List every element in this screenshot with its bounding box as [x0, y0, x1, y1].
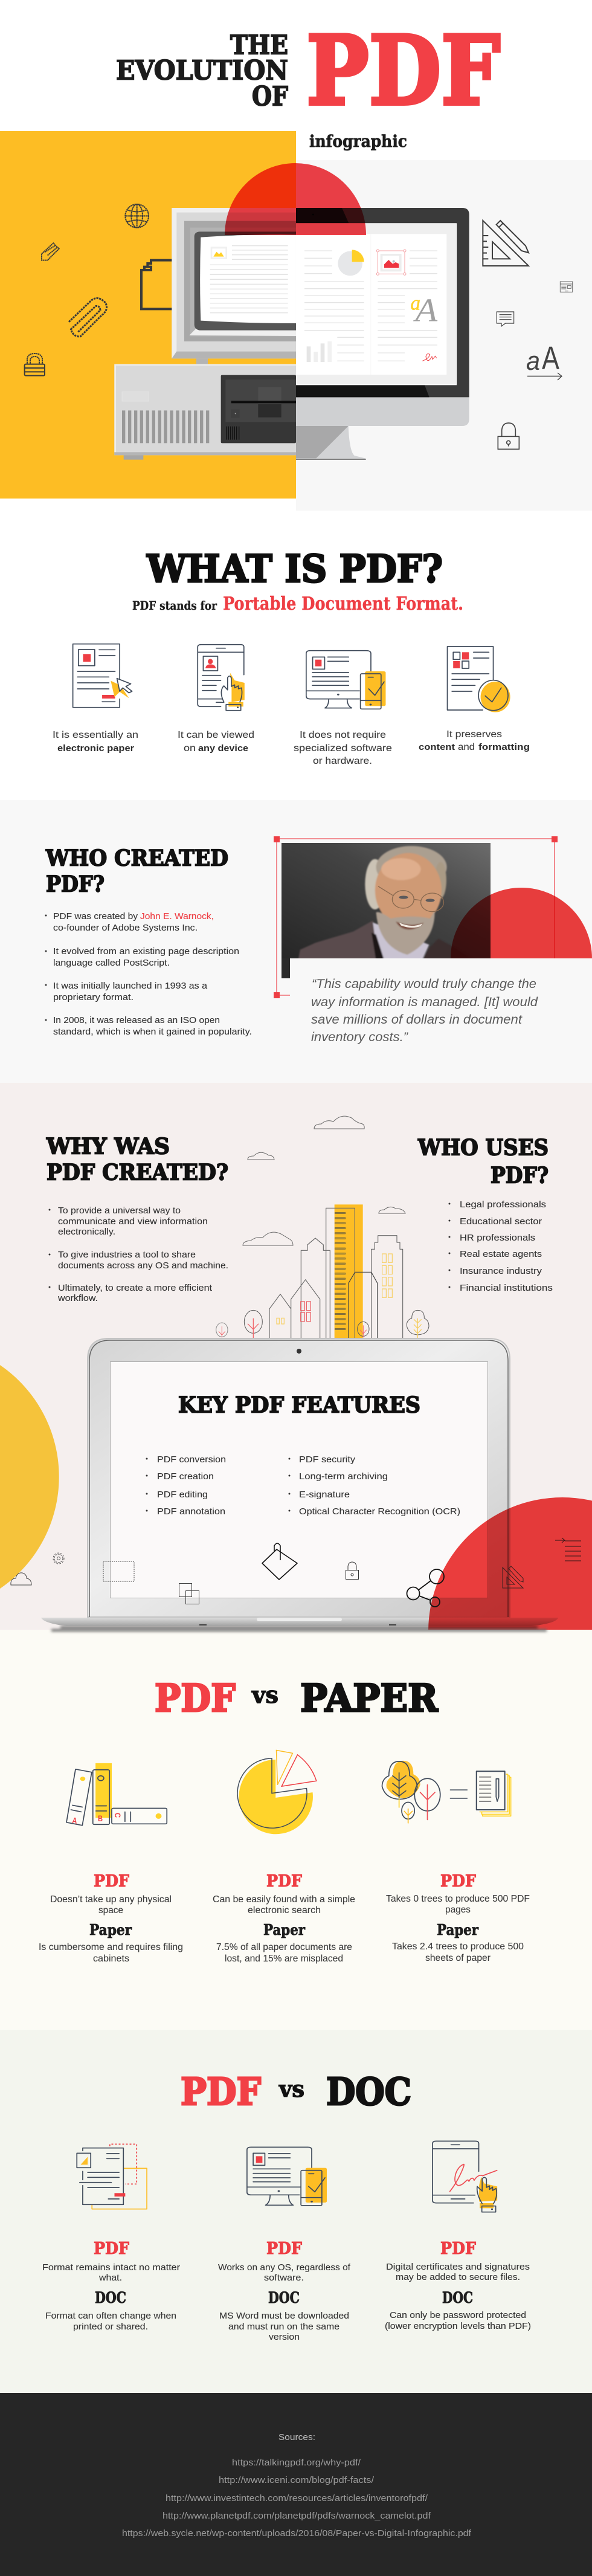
text: preserves formatting — [419, 729, 530, 752]
text: any device: on — [184, 743, 196, 754]
section background — [0, 800, 592, 1083]
modern monitor — [296, 208, 469, 460]
clouds — [243, 1116, 405, 1245]
column: format: Format remains intact no matter — [42, 2262, 180, 2273]
column: security: may be added to secure files. — [396, 2272, 520, 2282]
bullet list: why created: communicate and view information — [58, 1216, 208, 1227]
column: format: what. — [98, 2273, 122, 2283]
trees — [216, 1310, 429, 1338]
column: security: Digital certificates and signatures — [386, 2262, 530, 2272]
column: no physical space: Doesn’t take up any physical — [50, 1894, 172, 1905]
heading: what is pdf: WHAT IS PDF? — [146, 546, 443, 591]
monitor stand — [296, 426, 366, 460]
column: electronic search: electronic search — [248, 1905, 321, 1916]
bullet list: features left: PDF conversion — [157, 1454, 226, 1465]
laptop base — [41, 1618, 558, 1626]
bullet list: features right: E-signature — [299, 1490, 350, 1500]
column: format: DOC — [95, 2289, 126, 2306]
column: format: Format can often change when — [45, 2311, 176, 2321]
text: any device: It can be viewed — [178, 730, 254, 740]
monitor chin — [296, 397, 469, 426]
heading: pdf vs doc: PDF — [181, 2070, 261, 2114]
icon: share — [407, 1569, 444, 1607]
bullet list: features left: PDF creation — [157, 1471, 214, 1482]
modern document lines — [304, 251, 437, 361]
icon: text direction aA: A — [542, 340, 559, 376]
bullet list: who created: standard, which is when it gained in popularity. — [53, 1027, 252, 1037]
icon: pixel lock — [25, 353, 45, 376]
column: trees: sheets of paper — [425, 1953, 491, 1963]
icon: content preserved — [448, 647, 510, 712]
panel: pdf vs doc — [0, 2030, 592, 2393]
bullet list: features right: Optical Character Recognition (OCR) — [299, 1506, 460, 1517]
bullet list: who created: It was initially launched in 1993 as a — [53, 981, 208, 991]
column: electronic search: lost, and 15% are misplaced — [225, 1954, 343, 1964]
column: trees: Takes 0 trees to produce 500 PDF — [386, 1894, 530, 1904]
column: operating system: Works on any OS, regardless of — [218, 2262, 351, 2273]
laptop lid — [88, 1338, 510, 1617]
red selection frame — [274, 836, 558, 998]
illustration: city skyline — [216, 1204, 429, 1338]
icon: text direction aA: a — [526, 346, 540, 376]
bullet list: why created: To provide a universal way to — [58, 1206, 181, 1216]
laptop camera — [297, 1349, 301, 1354]
heading: pdf vs doc: vs — [278, 2076, 304, 2102]
column: operating system: version — [269, 2332, 300, 2342]
bullet list: why created — [48, 1206, 228, 1303]
heading: who uses pdf: WHO USES — [417, 1135, 549, 1160]
text: electronic paper: electronic paper — [57, 743, 134, 754]
retro system unit — [114, 364, 296, 460]
column: security: Can only be password protected — [390, 2310, 526, 2320]
typography sample: a — [410, 292, 420, 315]
column: operating system: and must run on the same — [228, 2322, 339, 2332]
text: electronic paper: It is essentially an — [53, 730, 138, 740]
panel: who created pdf — [45, 836, 592, 1044]
red semicircle overlay — [225, 163, 366, 235]
bullet list: who uses: Educational sector — [460, 1216, 542, 1227]
quote: “This capability would truly change the — [312, 976, 536, 991]
icon: electronic paper — [73, 644, 132, 708]
icon: format intact — [77, 2144, 147, 2209]
bullet list: who created: It evolved from an existing page description — [53, 946, 239, 957]
icon: speech bubble — [497, 312, 514, 326]
bullet list: why created: documents across any OS and machine. — [58, 1261, 228, 1271]
quote: save millions of dollars in document — [311, 1012, 523, 1027]
icon: binders — [66, 1763, 167, 1825]
yellow circle — [0, 1365, 59, 1589]
text: preserves formatting: and — [458, 742, 475, 752]
bullet list: who uses: Financial institutions — [460, 1283, 553, 1293]
icon: pie chart — [237, 1750, 317, 1834]
laptop — [41, 1338, 558, 1629]
panel: what is pdf — [53, 546, 530, 766]
icon: trees equal paper — [382, 1761, 511, 1823]
quote: way information is managed. [It] would — [311, 995, 538, 1009]
icon: padlock — [498, 423, 519, 449]
heading: who created pdf: WHO CREATED — [45, 846, 228, 871]
bullet list: who uses: Legal professionals — [460, 1199, 546, 1210]
column: no physical space: Is cumbersome and requires filing — [39, 1942, 183, 1952]
text: any device — [178, 730, 254, 754]
text: preserves formatting: formatting — [478, 742, 530, 752]
icon: small lock — [346, 1562, 359, 1580]
column: no physical space: Paper — [89, 1921, 132, 1938]
icon: any device — [198, 645, 245, 711]
text: no special software — [294, 730, 392, 766]
text: no special software: specialized software — [294, 743, 392, 754]
column: electronic search: 7.5% of all paper documents are — [216, 1942, 352, 1952]
bullet list: features left: PDF annotation — [157, 1506, 225, 1517]
bar chart — [307, 341, 332, 362]
bullet list: who created — [45, 911, 252, 1037]
bullet list: who created: In 2008, it was released as an ISO open — [53, 1015, 220, 1025]
column: operating system: DOC — [268, 2289, 300, 2306]
bullet list: features right — [289, 1454, 460, 1517]
source links: http://www.iceni.com/blog/pdf-facts/ — [219, 2476, 375, 2485]
picture frame with handles — [376, 250, 406, 275]
binder letters: C — [113, 1813, 122, 1818]
text: preserves formatting: It preserves — [446, 729, 502, 740]
column: trees: pages — [445, 1905, 471, 1915]
bullet list: who created: PDF was created by — [53, 911, 138, 922]
column: trees — [386, 1871, 530, 1963]
bullet list: why created: Ultimately, to create a more efficient — [58, 1283, 213, 1293]
column: electronic search: PDF — [266, 1871, 302, 1891]
icon: gear — [53, 1553, 64, 1564]
icon: paint bucket — [262, 1543, 297, 1580]
column: security: PDF — [440, 2239, 476, 2258]
typography sample: A — [413, 292, 437, 329]
bullet list: who uses: Real estate agents — [460, 1249, 542, 1259]
retro screen document lines — [210, 246, 288, 313]
icon: pixel paperclip — [69, 298, 106, 337]
quote: inventory costs.” — [311, 1030, 408, 1044]
bullet list: who created: John E. Warnock, — [140, 911, 214, 922]
icon: pixel file — [141, 260, 172, 309]
typography sample — [409, 292, 439, 329]
photo: John Warnock — [282, 843, 491, 978]
heading: who uses pdf: PDF? — [491, 1163, 549, 1188]
section background — [0, 2030, 592, 2393]
icon: text direction aA — [526, 340, 562, 380]
bullet list: why created: To give industries a tool to share — [58, 1250, 196, 1260]
heading: key pdf features: KEY PDF FEATURES — [178, 1392, 420, 1418]
heading: pdf vs paper: PAPER — [300, 1676, 439, 1720]
column: no physical space: PDF — [94, 1871, 129, 1891]
title: the evolution of: THE — [230, 30, 288, 60]
text: electronic paper — [53, 730, 138, 754]
subheading — [132, 593, 463, 615]
yellow tower — [335, 1204, 363, 1338]
quote — [311, 976, 538, 1044]
heading: pdf vs doc — [181, 2070, 411, 2114]
bullet list: features right: PDF security — [299, 1454, 356, 1465]
column: security: DOC — [442, 2289, 473, 2306]
red half circle — [451, 888, 592, 958]
grey backdrop — [296, 160, 592, 511]
icon: drafting tools — [483, 221, 529, 266]
yellow backdrop — [0, 131, 296, 499]
title: the evolution of: EVOLUTION — [116, 56, 288, 86]
heading: why was pdf created: WHY WAS — [46, 1134, 170, 1159]
column: format — [42, 2239, 180, 2332]
column: operating system: MS Word must be downloaded — [219, 2311, 349, 2321]
icon: cloud — [11, 1573, 31, 1585]
bullet list: who created: co-founder of Adobe Systems Inc. — [53, 923, 198, 933]
bullet list: who uses — [448, 1199, 553, 1293]
panel: pdf vs paper — [0, 1629, 592, 2030]
signature — [422, 354, 437, 361]
column: security — [385, 2239, 531, 2331]
text: no special software: or hardware. — [313, 756, 372, 766]
column: operating system: software. — [264, 2273, 304, 2283]
source links: http://www.investintech.com/resources/articles/inventorofpdf/ — [166, 2494, 428, 2503]
bullet list: features right: Long-term archiving — [299, 1471, 388, 1482]
column: no physical space — [39, 1871, 183, 1964]
bullet list: who uses: HR professionals — [460, 1233, 535, 1243]
heading: pdf vs doc: DOC — [326, 2070, 411, 2114]
icon: pixel pencil — [42, 243, 59, 260]
monitor bezel — [296, 208, 469, 397]
icon: monitor and phone — [306, 651, 385, 709]
subtitle: infographic: infographic — [309, 132, 407, 151]
heading: who created pdf: PDF? — [46, 871, 105, 897]
source links: https://talkingpdf.org/why-pdf/ — [232, 2458, 361, 2468]
icon: pixel globe — [125, 204, 149, 228]
column: electronic search — [213, 1871, 355, 1964]
bullet list: why created: electronically. — [58, 1227, 115, 1237]
heading: pdf vs paper — [155, 1676, 439, 1720]
retro computer — [114, 208, 296, 460]
section background — [0, 2393, 592, 2576]
source links: http://www.planetpdf.com/planetpdf/pdfs/warnock_camelot.pdf — [162, 2511, 431, 2521]
text: any device: any device — [198, 743, 248, 754]
red circle — [428, 1497, 592, 1630]
binder letters — [72, 1813, 122, 1825]
panel: hero illustration — [0, 131, 592, 511]
heading: why was pdf created — [46, 1134, 228, 1186]
subheading: PDF stands for — [132, 598, 217, 613]
section background — [0, 1083, 592, 1630]
icon: dotted rectangle — [103, 1561, 134, 1581]
heading: who created pdf — [45, 846, 228, 897]
source links — [122, 2458, 472, 2539]
column: operating system — [218, 2239, 351, 2342]
tower windows — [335, 1212, 346, 1330]
icon: indent lines — [555, 1538, 581, 1561]
title: PDF: PDF — [306, 16, 500, 127]
source links: https://web.sycle.net/wp-content/uploads/2016/08/Paper-vs-Digital-Infographic.pdf — [122, 2529, 472, 2539]
binder letters: A — [72, 1816, 78, 1825]
title: the evolution of — [116, 30, 288, 112]
icon: digital signature — [433, 2141, 497, 2212]
panel: why and who uses pdf with laptop — [0, 1083, 592, 1630]
heading: why was pdf created: PDF CREATED? — [47, 1160, 228, 1186]
title: the evolution of: OF — [252, 81, 288, 112]
icon: any OS — [247, 2147, 327, 2206]
column: format: printed or shared. — [73, 2322, 148, 2332]
binder letters: B — [98, 1814, 103, 1823]
column: security: (lower encryption levels than PDF) — [385, 2321, 531, 2331]
subheading: Portable Document Format. — [223, 593, 463, 615]
building windows — [277, 1254, 392, 1324]
laptop shadow overflow — [51, 1629, 547, 1632]
icon: browser window — [560, 282, 573, 292]
heading: pdf vs paper: PDF — [155, 1676, 236, 1720]
column: trees: Paper — [437, 1921, 478, 1938]
heading: pdf vs paper: vs — [251, 1681, 278, 1708]
bullet list: why created: workflow. — [57, 1293, 98, 1303]
section background — [0, 1630, 592, 2030]
column: operating system: PDF — [266, 2239, 302, 2258]
column: no physical space: space — [98, 1905, 123, 1916]
panel: title header — [116, 16, 500, 151]
column: electronic search: Can be easily found with a simple — [213, 1894, 355, 1905]
column: electronic search: Paper — [263, 1921, 305, 1938]
laptop shadow — [60, 1626, 538, 1629]
bullet list: who uses: Insurance industry — [460, 1266, 542, 1276]
column: trees: PDF — [440, 1871, 476, 1891]
panel: sources footer — [0, 2393, 592, 2576]
icon: small drafting tools — [503, 1566, 523, 1588]
retro monitor casing — [172, 208, 296, 364]
bullet list: features left: PDF editing — [157, 1490, 208, 1500]
pie chart — [338, 250, 364, 276]
monitor screen — [296, 223, 457, 385]
laptop screen — [110, 1362, 488, 1598]
bullet list: who created: language called PostScript. — [53, 958, 170, 968]
column: format: PDF — [94, 2239, 129, 2258]
text: no special software: It does not require — [300, 730, 386, 740]
bullet list: who created: proprietary format. — [53, 992, 134, 1002]
text: preserves formatting: content — [419, 742, 455, 752]
heading: who uses pdf — [417, 1135, 549, 1188]
icon: overlapping squares — [179, 1583, 199, 1604]
column: no physical space: cabinets — [93, 1954, 129, 1964]
bullet list: features left — [146, 1454, 226, 1517]
retro screen picture thumbnail — [211, 247, 227, 259]
column: trees: Takes 2.4 trees to produce 500 — [392, 1942, 524, 1952]
heading: sources: Sources: — [278, 2433, 315, 2442]
